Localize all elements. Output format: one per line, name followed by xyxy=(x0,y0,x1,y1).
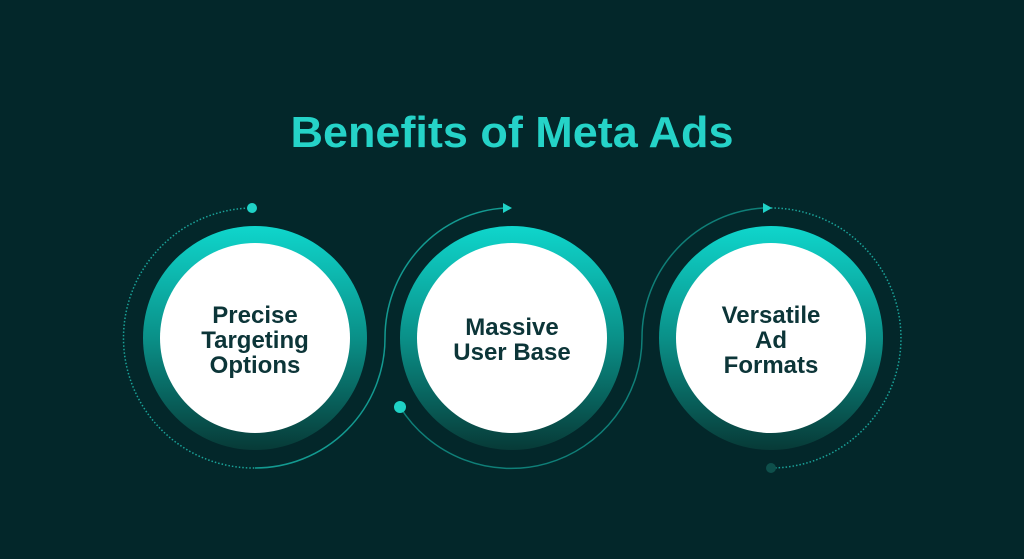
panel: massive user base xyxy=(400,226,624,450)
icon: arrow to circle 3 xyxy=(763,203,772,213)
panel: versatile ad formats: Ad xyxy=(755,327,787,354)
icon: dot circle 2 xyxy=(394,401,406,413)
icon: start dot xyxy=(247,203,257,213)
icon: end dot xyxy=(766,463,776,473)
panel: versatile ad formats: Formats xyxy=(724,352,818,379)
panel: versatile ad formats: Versatile xyxy=(722,302,820,329)
panel: precise targeting xyxy=(143,226,367,450)
panel: precise targeting: Targeting xyxy=(201,327,309,354)
panel: precise targeting: Options xyxy=(210,352,300,379)
panel: massive user base: Massive xyxy=(465,314,559,341)
panel: massive user base: User Base xyxy=(453,339,571,366)
panel: precise targeting: Precise xyxy=(212,302,298,329)
icon: arrow to circle 2 xyxy=(503,203,512,213)
title: Benefits of Meta Ads xyxy=(290,108,734,157)
panel: versatile ad formats xyxy=(659,226,883,450)
connector arcs xyxy=(123,208,901,468)
